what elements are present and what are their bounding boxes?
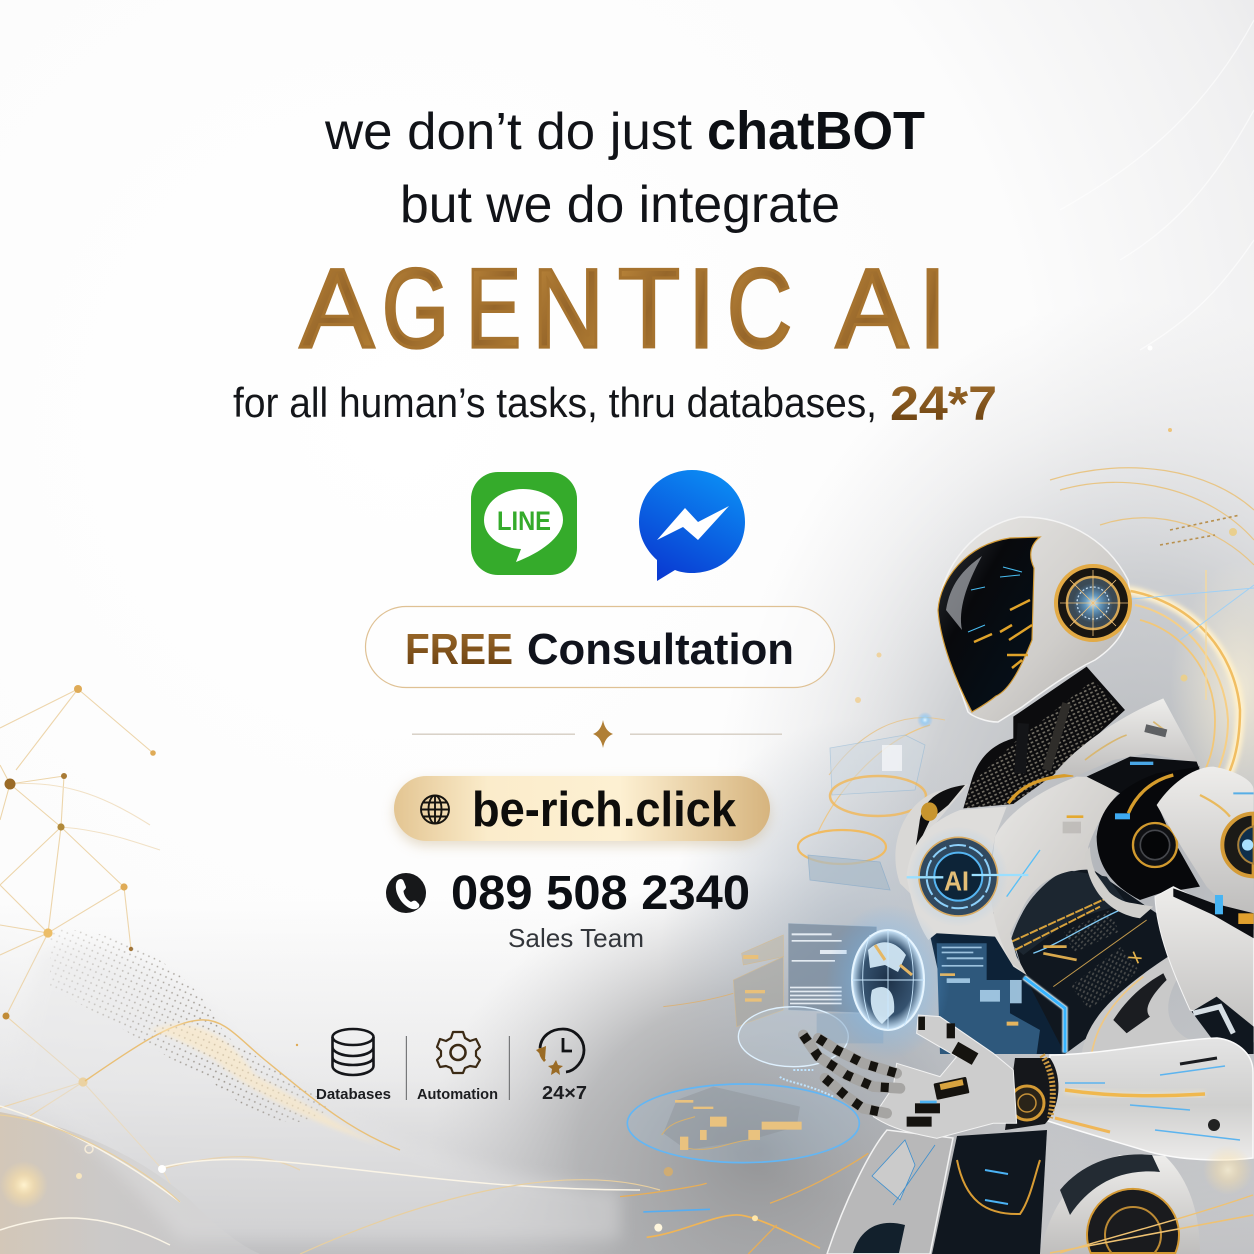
title: AGENTIC AI: N	[532, 246, 604, 371]
feature: automation	[417, 1032, 498, 1103]
AI emblem	[907, 827, 1028, 927]
feature row	[316, 1029, 587, 1103]
button: FREE Consultation: Consultation	[527, 625, 794, 674]
robot	[803, 517, 1254, 1254]
title: AGENTIC AI	[300, 246, 946, 371]
icon: Messenger	[639, 470, 745, 581]
dark abdomen	[927, 870, 1190, 1054]
light trails	[620, 993, 868, 1254]
feature: automation: Automation	[417, 1086, 498, 1103]
wave with halftone dots	[0, 930, 660, 1254]
robot head	[938, 517, 1130, 722]
button: FREE Consultation: FREE	[405, 625, 513, 674]
sales team label: Sales Team	[508, 923, 644, 953]
subtitle: 24*7	[890, 378, 997, 431]
feature: databases	[316, 1029, 391, 1103]
pill: website	[394, 776, 770, 841]
title: AGENTIC AI: I	[919, 246, 946, 371]
subtitle: for all human’s tasks, thru databases,	[233, 379, 877, 426]
helmet visor	[938, 537, 1040, 712]
upper arm	[1155, 767, 1254, 1054]
icon: LINE: LINE	[497, 506, 551, 536]
heading line 2: but we do integrate	[400, 176, 840, 234]
button: FREE Consultation	[366, 606, 834, 688]
icon: globe	[421, 796, 449, 824]
heading line 1: chatBOT	[707, 101, 925, 161]
icon: phone	[386, 873, 426, 913]
feature: databases: Databases	[316, 1086, 391, 1103]
robot wrist	[1005, 1055, 1058, 1130]
background network: gold nodes and lines	[0, 685, 300, 1254]
neck and cable mesh	[963, 667, 1125, 808]
title: AGENTIC AI: A	[300, 246, 374, 371]
divider with star	[412, 720, 782, 748]
heading line 1: we don’t do just	[324, 103, 693, 161]
AI emblem: AI	[944, 866, 969, 897]
holographic globe	[826, 904, 950, 1060]
sparkle: energy lights	[855, 652, 1253, 1253]
phone number: 089 508 2340	[451, 867, 750, 920]
hologram arcs behind head	[1050, 346, 1254, 775]
heading line 1	[324, 101, 925, 161]
rear shoulder	[895, 784, 968, 893]
shoulder joint	[1087, 757, 1200, 900]
icon: LINE	[471, 472, 577, 575]
hologram panels left of robot	[620, 718, 945, 1254]
feature: 24x7	[536, 1029, 587, 1103]
feature: 24x7: 24×7	[542, 1083, 587, 1103]
title: AGENTIC AI: G	[382, 246, 449, 371]
robot hand	[803, 1015, 1017, 1138]
hologram data screens	[627, 923, 883, 1163]
robot lower body	[827, 1130, 1253, 1254]
robot forearm	[1045, 1038, 1253, 1160]
title: AGENTIC AI: I	[688, 246, 715, 371]
title: AGENTIC AI: T	[618, 246, 680, 371]
title: AGENTIC AI: A	[836, 246, 908, 371]
pill: website: be-rich.click	[472, 783, 737, 837]
title: AGENTIC AI: C	[727, 246, 792, 371]
ear sensor	[1056, 566, 1130, 640]
chest armour	[907, 698, 1198, 975]
title: AGENTIC AI: E	[466, 246, 521, 371]
robot torso	[895, 667, 1254, 1054]
